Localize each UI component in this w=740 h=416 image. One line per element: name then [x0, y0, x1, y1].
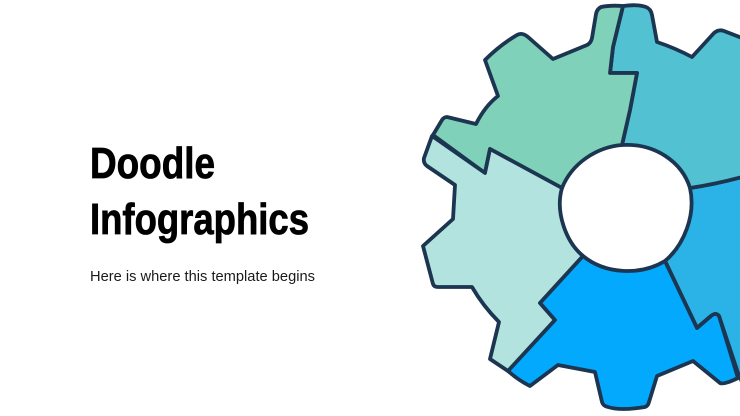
gear segment: light blue right	[665, 177, 740, 382]
gear segment: bright blue bottom	[508, 256, 738, 409]
title: Doodle	[90, 139, 215, 188]
title: Infographics	[90, 195, 309, 244]
gear segment: pale aqua left	[423, 136, 583, 371]
title	[90, 139, 309, 244]
gear segment: green top left	[433, 6, 637, 188]
gear diagram	[423, 5, 740, 409]
gear segment: teal top right	[610, 5, 740, 188]
subtitle: Here is where this template begins	[90, 268, 315, 285]
